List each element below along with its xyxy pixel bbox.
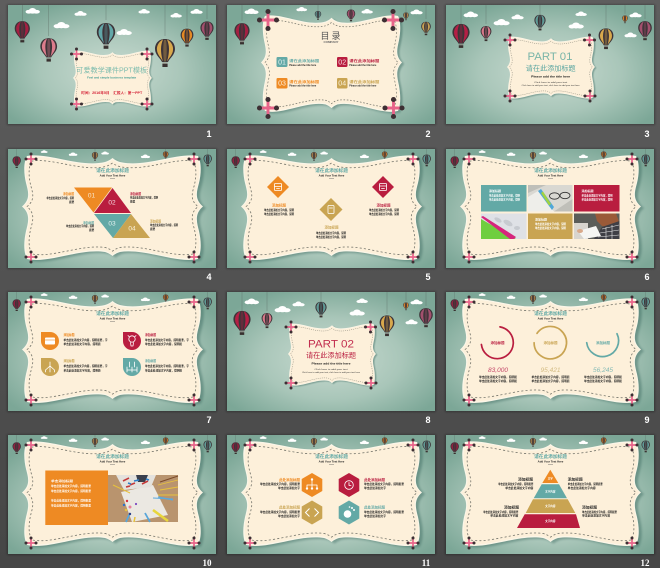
pyramid label: upper left: 添加标题: [518, 476, 533, 482]
slide title: 请在此添加标题: [96, 310, 129, 317]
label 04: 扼要: [150, 227, 156, 231]
diamond item: crimson: 单击此处添加文字内容，简明: [369, 212, 399, 216]
label 01: [46, 191, 75, 204]
frame with balloons: [232, 435, 431, 550]
triangle 04: 04: [128, 226, 136, 232]
teardrop item: gold: 添加标题: [64, 358, 75, 363]
slide number 2: 2: [425, 129, 431, 139]
contents item 01: Please add the title here: [289, 63, 317, 67]
teardrop item: teal: 添加标题: [145, 358, 156, 363]
slide title: 请在此添加标题: [534, 167, 567, 174]
contents item 02: Please add the title here: [349, 63, 377, 67]
diamond item: gold: [316, 198, 346, 239]
diamond item: gold: 单击此处添加文字内容，简明: [316, 231, 346, 235]
frame with balloons: [450, 292, 650, 406]
contents item 01: 请在此添加标题: [289, 58, 320, 63]
slide title: 请在此添加标题: [315, 167, 348, 174]
ring statistic: gold: 95,421: [541, 367, 561, 374]
ring statistic: gold: 添加标题: [544, 340, 558, 345]
hexagon item: gold: 此处添加标题: [279, 504, 300, 510]
pyramid label: lower right: 单击此处添加文字内容，简明扼要: [582, 510, 617, 514]
slide number 12: 12: [640, 558, 650, 568]
pyramid label: upper left: [498, 476, 534, 490]
slide title: [534, 167, 567, 178]
slide number 4: 4: [206, 272, 212, 282]
orange text panel: 单击添加标题: [51, 479, 74, 483]
frame with balloons: [12, 435, 212, 550]
frame with balloons: [450, 149, 650, 264]
slide title: Add Your Text Here: [538, 460, 564, 464]
hexagon item: crimson: [339, 473, 404, 497]
gold tile: 添加标题: [535, 218, 547, 222]
teardrop item: crimson: 单击此处添加文字内容，简明扼: [145, 342, 182, 346]
hexagon item: orange: [260, 473, 322, 497]
orange text panel: 单击此处添加文字内容，简明扼要: [51, 484, 91, 488]
contents item 01: [276, 57, 320, 67]
contents item 02: 请在此添加标题: [349, 58, 380, 63]
ring statistic: crimson: 单击此处添加文字内容，简明扼: [479, 375, 517, 379]
slide 10: text with photo: [7, 434, 217, 555]
slide title: Add Your Text Here: [100, 174, 126, 178]
slide 8: part 02 divider: [226, 292, 436, 412]
teardrop item: crimson: [123, 332, 189, 350]
pyramid label: lower left: 添加标题: [504, 504, 519, 510]
part subtitle: Please add the title here: [531, 74, 571, 78]
teardrop item: crimson: 添加标题: [145, 332, 156, 337]
slide 2: contents: [226, 4, 436, 125]
slide number 3: 3: [644, 129, 650, 139]
triangle 01: 01: [88, 192, 95, 200]
photo: book and glasses: [528, 185, 572, 212]
slide number 11: 11: [422, 558, 431, 568]
pyramid label: lower left: 单击此处添加文字内容，简明扼要: [483, 510, 519, 514]
ring statistic: gold: [532, 326, 570, 383]
slide title: 请在此添加标题: [96, 167, 129, 174]
teal tile: 单击此处添加文字内容，简明: [489, 198, 520, 202]
gold tile: 单击此处添加文字内容，简明: [535, 226, 566, 230]
slide number 1: 1: [206, 129, 212, 139]
hexagon item: teal: 此处添加标题: [364, 504, 385, 510]
company caption: COMPANY: [323, 40, 339, 44]
hexagon item: orange: 单击此处添加文字内容，简明扼要: [260, 482, 300, 486]
pyramid label: upper right: 单击此处添加文字内容: [568, 486, 596, 490]
gold tile: 单击此处添加文字内容，简明: [535, 222, 566, 226]
diamond item: orange: 添加标题: [272, 202, 286, 208]
contents item 02: 02: [338, 59, 346, 66]
pyramid label: upper left: 单击此处添加文字内容，简明扼要: [498, 482, 534, 486]
pyramid chart: 文字: [548, 476, 553, 480]
orange text panel: [45, 470, 108, 525]
crimson tile: 单击此处添加文字内容，简明: [582, 194, 613, 198]
pyramid label: upper right: 单击此处添加文字内容，简明扼要: [568, 482, 603, 486]
label 03: 添加标题: [83, 220, 94, 225]
contents item 04: 请在此添加标题: [349, 79, 380, 84]
slide number 5: 5: [425, 272, 431, 282]
label 03: [66, 220, 95, 232]
slide title: Add Your Text Here: [538, 316, 564, 320]
triangle 02: 02: [108, 200, 116, 206]
label 03: 单击此处添加文字内容，简明: [66, 224, 94, 228]
pyramid chart: 文字内容: [545, 490, 556, 494]
diamond item: orange: 单击此处添加文字内容，简明: [264, 208, 294, 212]
pyramid label: lower left: 单击此处添加文字内容: [490, 514, 519, 518]
balloons, clouds and frame: [233, 292, 433, 390]
part title: 请在此添加标题: [526, 64, 576, 72]
teardrop item: teal: 单击此处添加文字内容，简明扼: [145, 368, 182, 372]
slide number 9: 9: [644, 415, 650, 425]
contents item 03: 03: [278, 80, 286, 88]
pyramid label: upper left: 单击此处添加文字内容: [505, 486, 534, 490]
label 02: [130, 191, 158, 204]
hexagon item: gold: [260, 500, 322, 524]
part caption: Click here to add your text, click here to add your text here: [522, 84, 580, 87]
slide 12: pyramid: [445, 434, 655, 555]
cover title: 可爱教学课件PPT模板: [76, 66, 147, 74]
part caption: [302, 368, 360, 374]
ring statistic: teal: [584, 334, 622, 383]
ring statistic: teal: 单击此处添加文字内容，简明扼: [584, 379, 622, 383]
teal tile: [481, 185, 526, 212]
pyramid label: upper right: [568, 476, 603, 490]
slide 9: ring statistics: [445, 292, 655, 412]
contents item 04: [337, 78, 380, 88]
contents item 04: 04: [338, 80, 346, 88]
ring statistic: teal: 56,245: [593, 367, 613, 374]
part caption: Click here to add your text: [534, 81, 568, 84]
label 01: 单击此处添加文字内容，简明: [46, 196, 74, 200]
pyramid chart: 文字内容: [545, 519, 556, 523]
teardrop item: crimson: 单击此处添加文字内容，简明扼要，字: [145, 338, 189, 342]
slide title: [315, 453, 348, 464]
hexagon item: gold: 单击此处添加文字: [278, 514, 300, 518]
slide title: 请在此添加标题: [534, 453, 567, 460]
diamond item: crimson: 单击此处添加文字内容，简明: [369, 208, 399, 212]
slide title: [315, 167, 348, 178]
part heading: PART 02: [308, 338, 354, 350]
part caption: [522, 81, 580, 87]
diamond item: crimson: [369, 176, 399, 216]
slide title: [534, 310, 567, 321]
slide title: [96, 310, 129, 321]
ring statistic: crimson: 单击此处添加文字内容，简明扼: [479, 379, 517, 383]
frame with balloons: [12, 292, 212, 406]
crimson tile: [574, 185, 620, 212]
cover subtitle: Feel and simple business template: [87, 76, 137, 80]
ring statistic: teal: 添加标题: [596, 340, 610, 345]
pyramid label: upper right: 添加标题: [568, 476, 583, 482]
slide title: Add Your Text Here: [319, 174, 345, 178]
slide title: [96, 167, 129, 178]
teardrop item: gold: 单击此处添加文字内容，简明扼要，字: [64, 364, 108, 368]
photo: spiral notebook: [481, 214, 526, 239]
pyramid label: lower right: [582, 504, 617, 518]
ring statistic: teal: 单击此处添加文字内容，简明扼: [584, 375, 622, 379]
part subtitle: Please add the title here: [312, 362, 351, 366]
teal tile: 单击此处添加文字内容，简明: [489, 194, 520, 198]
label 03: 扼要: [89, 228, 95, 232]
ring statistic: crimson: 添加标题: [490, 340, 505, 345]
slide number 10: 10: [202, 558, 212, 568]
balloons, clouds and frame: [452, 5, 652, 102]
ring statistic: crimson: 83,000: [488, 367, 508, 374]
contents frame: [257, 9, 405, 119]
teardrop item: gold: [41, 358, 108, 376]
diamond item: orange: [264, 176, 294, 216]
triangle 01: [74, 188, 112, 212]
pyramid label: lower left: [483, 504, 519, 518]
gold tile: [528, 214, 572, 239]
pyramid label: lower right: 添加标题: [582, 504, 597, 510]
contents item 03: Please add the title here: [289, 84, 317, 88]
ring statistic: gold: 单击此处添加文字内容，简明扼: [532, 379, 570, 383]
teardrop item: gold: 单击此处添加文字内容，简明扼: [64, 368, 101, 372]
balloons and clouds: [234, 5, 431, 44]
contents item 03: [276, 78, 320, 88]
contents item 01: 01: [278, 59, 286, 66]
contents heading: 目录: [320, 31, 343, 41]
slide title: [534, 453, 567, 464]
slide 7: four teardrop items: [7, 292, 217, 412]
teardrop item: orange: [41, 332, 108, 350]
photo: student writing: [574, 214, 620, 239]
slide number 6: 6: [644, 272, 650, 282]
triangle 04: [113, 214, 150, 238]
orange text panel: 单击此处添加文字内容，简明扼要: [51, 504, 91, 508]
hexagon item: orange: 单击此处添加文字: [278, 486, 300, 490]
diamond item: gold: 单击此处添加文字内容，简明: [316, 235, 346, 239]
hexagon item: teal: 单击此处添加文字内容，简明扼要: [364, 510, 404, 514]
hexagon item: teal: 单击此处添加文字: [364, 514, 386, 518]
diamond item: orange: 单击此处添加文字内容，简明: [264, 212, 294, 216]
diamond item: gold: 添加标题: [324, 224, 339, 230]
photo: paints and pencils: [108, 475, 178, 522]
diamond item: crimson: 添加标题: [376, 202, 391, 208]
slide number 7: 7: [206, 415, 212, 425]
label 02: 扼要: [130, 200, 136, 204]
frame with balloons: [450, 435, 650, 550]
label 02: 添加标题: [130, 191, 141, 196]
triangle 03: 03: [108, 220, 116, 228]
slide title: Add Your Text Here: [100, 460, 126, 464]
teardrop item: teal: [123, 358, 189, 376]
label 01: 添加标题: [63, 191, 74, 196]
orange text panel: 单击此处添加文字内容，简明扼要: [51, 498, 91, 502]
teardrop item: orange: 添加标题: [64, 332, 75, 337]
hexagon item: crimson: 此处添加标题: [364, 477, 385, 482]
frame with balloons: [12, 149, 212, 264]
label 01: 扼要: [69, 200, 75, 204]
part title: 请在此添加标题: [306, 350, 356, 360]
slide title: 请在此添加标题: [96, 453, 129, 460]
hexagon item: teal: [339, 500, 404, 524]
pyramid label: lower right: 单击此处添加文字内容: [582, 514, 610, 518]
triangle 03: [94, 214, 131, 238]
pyramid chart: 文字内容: [545, 504, 556, 508]
slide 4: triangle process: [7, 148, 217, 269]
slide 5: three diamonds: [226, 148, 436, 269]
contents item 03: 请在此添加标题: [289, 79, 320, 84]
part caption: Click here to add your text: [314, 368, 348, 371]
hexagon item: crimson: 单击此处添加文字内容，简明扼要: [364, 482, 404, 486]
slide number 8: 8: [425, 415, 431, 425]
part heading: PART 01: [528, 51, 572, 63]
label 04: 单击此处添加文字内容，简明: [150, 223, 178, 227]
hexagon item: gold: 单击此处添加文字内容，简明扼要: [260, 510, 300, 514]
part caption: Click here to add your text, click here to add your text here: [302, 371, 360, 374]
slide title: Add Your Text Here: [538, 174, 564, 178]
orange text panel: 单击此处添加文字内容，简明扼要: [51, 489, 91, 493]
teardrop item: orange: 单击此处添加文字内容，简明扼: [64, 342, 101, 346]
label 04: [150, 218, 178, 231]
frame with balloons: [232, 149, 431, 264]
hexagon item: orange: 此处添加标题: [279, 477, 300, 482]
slide title: Add Your Text Here: [100, 316, 126, 320]
crimson tile: 添加标题: [582, 189, 594, 193]
crimson tile: 单击此处添加文字内容，简明: [582, 198, 613, 202]
slide 11: hexagons: [226, 434, 436, 555]
contents item 02: [337, 57, 380, 67]
teardrop item: teal: 单击此处添加文字内容，简明扼要，字: [145, 364, 189, 368]
slide title: 请在此添加标题: [534, 310, 567, 317]
label 02: 单击此处添加文字内容，简明: [130, 196, 158, 200]
hexagon item: crimson: 单击此处添加文字: [364, 486, 386, 490]
teardrop item: orange: 单击此处添加文字内容，简明扼要，字: [64, 338, 108, 342]
cover date and presenter: 时间：2016年5月 汇报人：第一PPT: [81, 90, 143, 95]
contents item 04: Please add the title here: [349, 84, 377, 88]
ring statistic: crimson: [479, 327, 517, 383]
cover frame: [70, 48, 154, 110]
slide title: 请在此添加标题: [315, 453, 348, 460]
slide 1: cover: [7, 4, 217, 125]
slide 3: part 01 divider: [445, 4, 655, 125]
label 04: 添加标题: [150, 218, 161, 224]
slide title: Add Your Text Here: [319, 460, 345, 464]
ring statistic: gold: 单击此处添加文字内容，简明扼: [532, 375, 570, 379]
slide title: [96, 453, 129, 464]
triangle 02: [94, 188, 131, 213]
teal tile: 添加标题: [489, 189, 501, 193]
hanging balloons and clouds: [15, 5, 214, 67]
pyramid chart: [517, 470, 580, 528]
slide 6: photo grid: [445, 148, 655, 269]
